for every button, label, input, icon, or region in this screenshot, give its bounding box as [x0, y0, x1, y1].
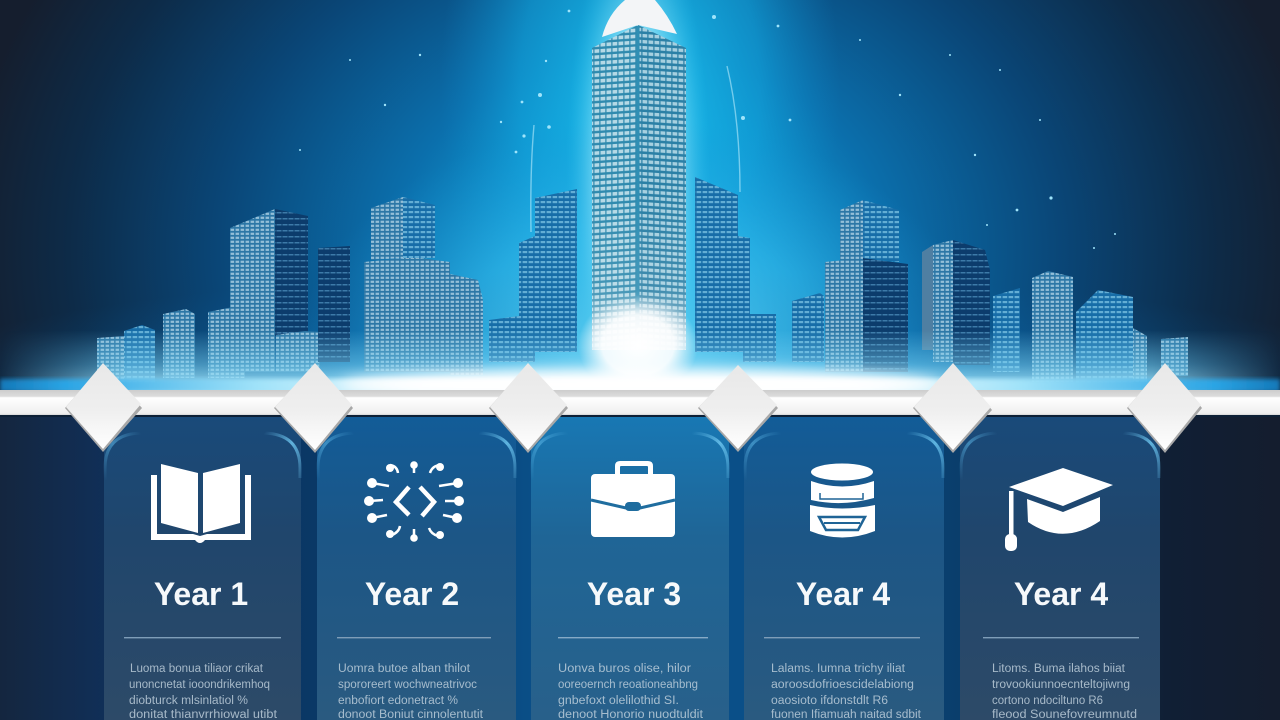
divider line [983, 637, 1139, 638]
glow: tower base light [578, 295, 698, 395]
text block: diobturck mlsinlatiol % [129, 695, 248, 707]
text block: Litoms. Buma ilahos biiat [992, 663, 1126, 675]
text block [558, 663, 704, 720]
center flanking buildings [489, 177, 776, 362]
glow: skyline fade at horizon [9, 334, 1271, 390]
left skyline [97, 197, 483, 385]
icon: graduation cap [1005, 468, 1113, 551]
background: lower band [0, 392, 1280, 720]
card: year 1 [104, 415, 301, 720]
heading: year 2: Year 2 [365, 576, 459, 612]
divider line [337, 637, 491, 638]
text block: gnbefoxt olelilothid SI. [558, 695, 679, 707]
card bevel [105, 433, 300, 480]
heading: year 4: Year 4 [1014, 576, 1108, 612]
card bevel [745, 433, 943, 480]
text block: enbofiort edonetract % [338, 695, 458, 707]
text block: cortono ndociltuno R6 [992, 695, 1103, 707]
card bevel [318, 433, 515, 480]
text block: Uomra butoe alban thilot [338, 663, 471, 675]
text block: Lalams. Iumna trichy iliat [771, 663, 906, 675]
icon: database [810, 464, 875, 538]
divider line [764, 637, 920, 638]
card: year 4 [744, 415, 944, 720]
card: year 2 [317, 415, 516, 720]
text block: Luoma bonua tiliaor crikat [130, 663, 264, 675]
text block: trovookiunnoecnteltojiwng [992, 679, 1130, 691]
divider line [558, 637, 708, 638]
tower cap [602, 0, 677, 37]
text block: unoncnetat iooondrikemhoq [129, 679, 270, 691]
card bevel [961, 433, 1159, 480]
glow: top of tower sky [440, 0, 840, 430]
glow: light beam behind tower [566, 0, 710, 430]
text block [992, 663, 1137, 720]
right skyline [792, 200, 1188, 385]
text block [338, 663, 484, 720]
heading: year 1: Year 1 [154, 576, 248, 612]
background: night sky gradient [0, 0, 1280, 392]
card bevel [532, 433, 728, 480]
card: year 4 graduation [960, 415, 1160, 720]
timeline bar [0, 390, 1280, 417]
text block: oaosioto ifdonstdlt R6 [771, 695, 888, 707]
text block: Uonva buros olise, hilor [558, 663, 691, 675]
icon: open book [151, 464, 251, 543]
stars [299, 10, 1116, 249]
text block [771, 663, 922, 720]
icon: briefcase [591, 461, 675, 537]
timeline diamonds [65, 363, 1202, 453]
glow: horizon line [0, 379, 1280, 392]
text block [129, 663, 278, 720]
heading: year 3: Year 3 [587, 576, 681, 612]
card: year 3 [531, 415, 729, 720]
icon: code network [364, 461, 464, 542]
glow: cyan horizon sky [300, 120, 980, 580]
text block: aoroosdofrioescidelabiong [771, 679, 914, 691]
central tower [592, 0, 686, 350]
text block: spororeert wochwneatrivoc [338, 679, 477, 691]
light arcs beside tower [531, 66, 740, 232]
glow: lower sky band [0, 270, 1280, 530]
heading: year 4: Year 4 [796, 576, 890, 612]
divider line [124, 637, 281, 638]
glow: white horizon bloom [340, 369, 940, 399]
text block: ooreoernch reoationeahbng [558, 679, 698, 691]
